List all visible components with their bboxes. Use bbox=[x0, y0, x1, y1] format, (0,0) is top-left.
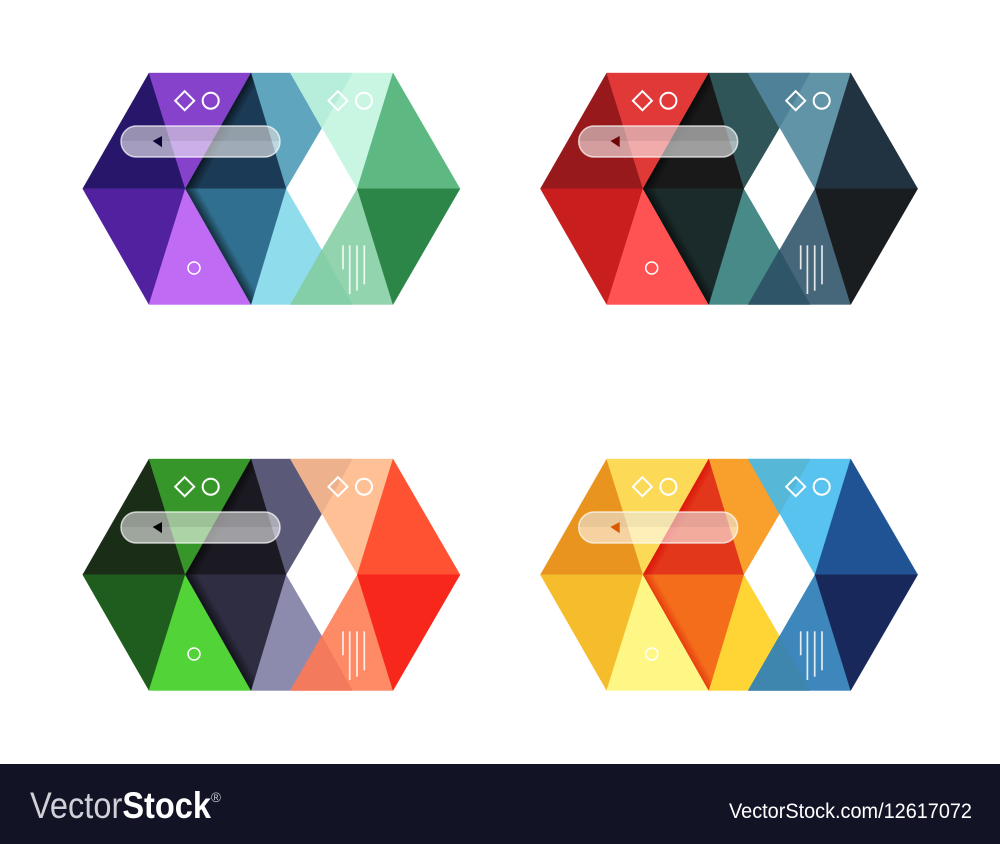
icon: vertical lines bbox=[343, 631, 364, 680]
icon: diamond and circle right bbox=[786, 91, 830, 110]
icon: vertical lines bbox=[801, 245, 822, 294]
translucent label pill bbox=[579, 512, 738, 543]
right hexagon segment bbox=[748, 459, 918, 690]
right hexagon segment bbox=[290, 73, 460, 304]
panel: yellow orange blue hexagon bbox=[540, 459, 918, 690]
middle hexagon segment bbox=[643, 459, 779, 690]
logo wordmark: VectorStock bbox=[30, 785, 211, 826]
translucent label pill bbox=[121, 126, 280, 157]
panel: red teal slate hexagon bbox=[540, 73, 918, 304]
left hexagon segment bbox=[540, 73, 709, 304]
right hexagon segment bbox=[290, 459, 460, 690]
icon: diamond and circle right bbox=[786, 477, 830, 496]
icon: vertical lines bbox=[343, 245, 364, 294]
middle hexagon segment bbox=[643, 73, 779, 304]
image id url: VectorStock.com/12617072 bbox=[729, 800, 972, 823]
icon: diamond and circle left bbox=[175, 477, 219, 496]
icon: small circle bbox=[188, 648, 200, 660]
translucent label pill bbox=[121, 512, 280, 543]
right hexagon segment bbox=[748, 73, 918, 304]
left hexagon segment bbox=[83, 459, 251, 690]
icon: small circle bbox=[646, 648, 658, 660]
icon: diamond and circle left bbox=[633, 91, 676, 110]
icon: small circle bbox=[188, 262, 200, 274]
translucent label pill bbox=[579, 126, 738, 157]
panel: green indigo orange hexagon bbox=[83, 459, 460, 690]
middle hexagon segment bbox=[185, 73, 322, 304]
icon: diamond and circle right bbox=[328, 91, 372, 110]
footer band bbox=[0, 764, 1000, 844]
panel: purple teal green hexagon bbox=[83, 73, 460, 304]
icon: small circle bbox=[646, 262, 658, 274]
middle hexagon segment bbox=[185, 459, 322, 690]
left hexagon segment bbox=[540, 459, 709, 690]
left hexagon segment bbox=[83, 73, 251, 304]
registered mark: ® bbox=[211, 790, 221, 805]
icon: diamond and circle left bbox=[175, 91, 219, 110]
icon: diamond and circle left bbox=[633, 477, 676, 496]
icon: diamond and circle right bbox=[328, 477, 372, 496]
icon: vertical lines bbox=[801, 631, 822, 680]
